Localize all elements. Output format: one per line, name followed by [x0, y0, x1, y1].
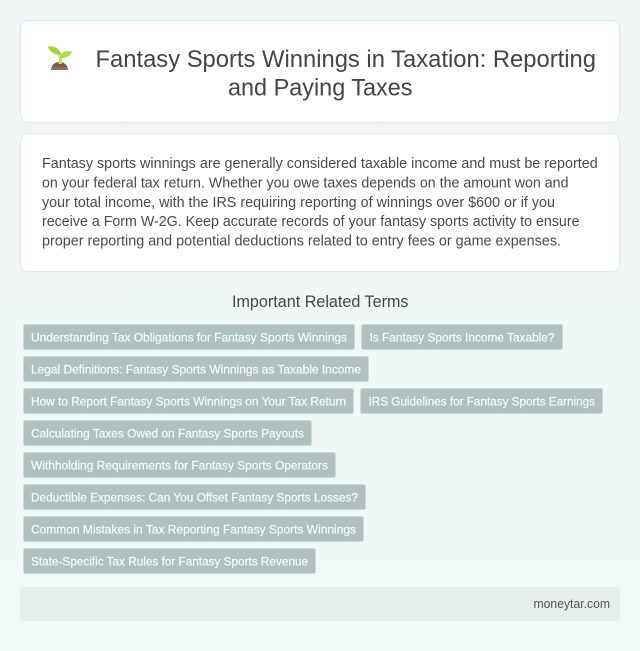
tag: Legal Definitions: Fantasy Sports Winnings as Taxable Income: [31, 362, 361, 376]
tag: [362, 324, 562, 350]
text block: summary: your total income, with the IRS requiring reporting of winnings over $600 or if you: [42, 195, 555, 211]
tag: IRS Guidelines for Fantasy Sports Earnings: [368, 394, 595, 408]
icon: seedling: [48, 46, 72, 70]
title: [96, 46, 596, 102]
panel: summary paragraph: [20, 134, 620, 272]
panel: title card: [20, 20, 620, 122]
text block: summary: proper reporting and potential deductions related to entry fees or game expenses.: [42, 234, 561, 250]
tag: [24, 324, 354, 350]
tag: [24, 452, 336, 478]
tag: Is Fantasy Sports Income Taxable?: [370, 330, 555, 344]
heading: important related terms: Important Related Terms: [232, 293, 408, 311]
footer: [20, 587, 620, 621]
tag: Deductible Expenses: Can You Offset Fantasy Sports Losses?: [31, 490, 358, 504]
tag: [24, 388, 354, 414]
tag: State-Specific Tax Rules for Fantasy Sports Revenue: [31, 554, 308, 568]
tag: [24, 420, 312, 446]
text block: summary: on your federal tax return. Whether you owe taxes depends on the amount won and: [42, 176, 568, 192]
tag: [360, 388, 602, 414]
title: Fantasy Sports Winnings in Taxation: Reporting: [96, 46, 596, 73]
tag: Withholding Requirements for Fantasy Sports Operators: [31, 458, 328, 472]
text block: summary: receive a Form W-2G. Keep accurate records of your fantasy sports activity to ensure: [42, 214, 580, 230]
text block: summary: Fantasy sports winnings are generally considered taxable income and must be reported: [42, 156, 598, 172]
tag: Common Mistakes in Tax Reporting Fantasy Sports Winnings: [31, 522, 356, 536]
tag: How to Report Fantasy Sports Winnings on Your Tax Return: [31, 394, 346, 408]
tag: [24, 484, 366, 510]
title: and Paying Taxes: [228, 74, 412, 102]
tag: [24, 516, 364, 542]
tag: [24, 548, 316, 574]
tag: [24, 356, 368, 382]
tag list: [24, 324, 602, 574]
footer: moneytar.com: [534, 596, 610, 611]
text block: summary: [42, 156, 598, 250]
tag: Understanding Tax Obligations for Fantasy Sports Winnings: [31, 330, 347, 344]
tag: Calculating Taxes Owed on Fantasy Sports Payouts: [31, 426, 304, 440]
